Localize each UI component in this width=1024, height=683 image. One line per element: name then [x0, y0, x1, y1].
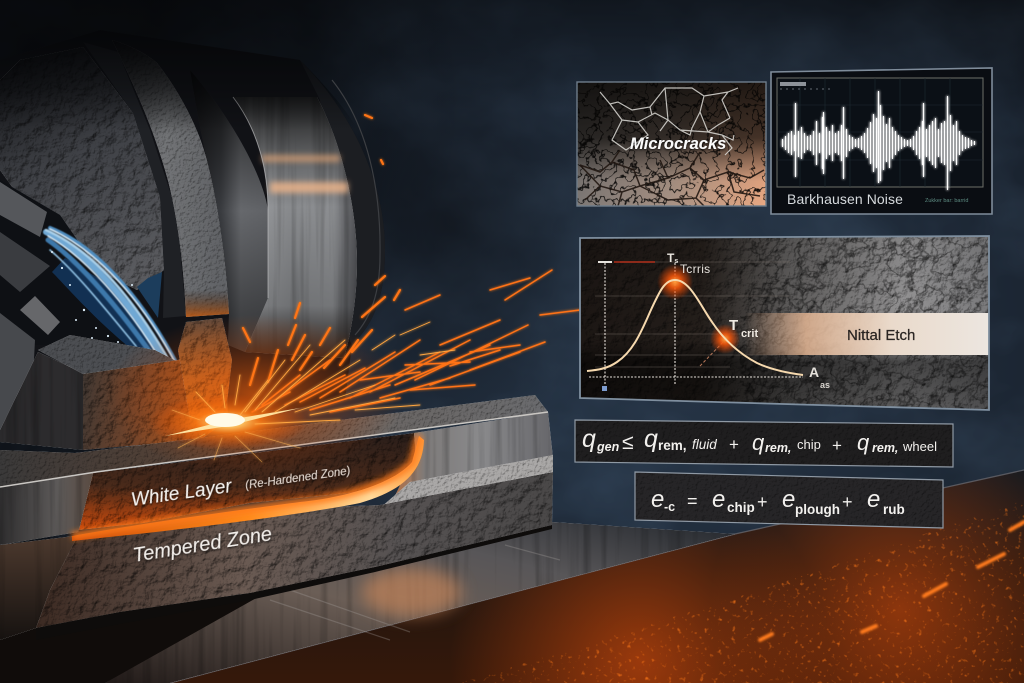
rough grinding face: [0, 47, 164, 290]
temperature curve: [587, 280, 803, 375]
equation text: rem,: [765, 441, 791, 455]
steel bed: [105, 522, 735, 683]
Barkhausen noise label: Barkhausen Noise: [787, 191, 903, 207]
equation text: q: [644, 425, 658, 453]
wheel top shadow: [0, 30, 358, 130]
equation text: rem,: [872, 441, 898, 455]
waveform core: [782, 140, 974, 146]
white layer label: (Re-Hardened Zone): [244, 465, 351, 492]
equation text: q: [582, 425, 596, 453]
equation text: +: [729, 435, 739, 454]
grinding wheel: [0, 30, 385, 420]
waveform: [782, 91, 974, 190]
microcracks label: Microcracks: [630, 135, 726, 153]
equation text: e: [651, 486, 664, 513]
As label: as: [820, 380, 830, 390]
lower dark crack cells: [580, 150, 764, 206]
block left face: [0, 352, 83, 450]
microcrack network: [600, 88, 738, 155]
nital etch band: [745, 313, 989, 355]
middle nozzle block: [0, 232, 50, 292]
chart axes: [589, 263, 803, 385]
hot seam: [72, 436, 424, 541]
lower left block: [0, 313, 35, 430]
equation text: fluid: [692, 437, 717, 452]
light band: [380, 455, 553, 508]
right steel face: [393, 412, 553, 500]
plot header chip: [780, 82, 806, 86]
equation text: rub: [883, 502, 905, 517]
equation text: [651, 486, 905, 517]
steel rim: [112, 40, 229, 317]
chart gridlines: [595, 262, 790, 367]
Ts label: s: [674, 258, 678, 265]
nozzle backing: [0, 180, 150, 345]
equation text: chip: [797, 437, 821, 452]
middle ring band: [190, 70, 268, 352]
rough lower zone: [36, 472, 553, 628]
panel: temperature curve and nital etch: [580, 236, 990, 411]
equation text: plough: [795, 502, 840, 517]
blue wedge: [137, 272, 162, 318]
grinding fire glow: [105, 315, 405, 475]
block front rough face: [83, 340, 228, 450]
equation: energy partition: [635, 472, 943, 528]
equation: heat balance: [575, 420, 953, 467]
equation text: q: [857, 430, 870, 455]
coolant nozzle assembly: [0, 180, 150, 430]
equation text: rem,: [658, 438, 687, 453]
equation text: =: [687, 491, 698, 511]
block top face: [38, 335, 178, 374]
outer wheel ring: [300, 60, 385, 345]
sparks: [172, 115, 580, 462]
dark base under slab: [0, 596, 260, 683]
axis origin marker: [602, 386, 607, 391]
equation text: +: [832, 436, 842, 455]
dark groove: [83, 42, 186, 318]
waveform plot frame: [777, 78, 983, 187]
lower left face: [0, 528, 150, 640]
equation text: gen: [596, 440, 620, 454]
Tcrit subscript label: crit: [741, 328, 758, 340]
steel cylinder: [233, 97, 357, 358]
white layer label: White Layer: [130, 476, 234, 511]
slab top surface: [0, 395, 548, 487]
white layer label: [130, 459, 352, 511]
equation text: e: [867, 486, 880, 513]
equation text: q: [752, 430, 765, 455]
equation text: wheel: [902, 439, 937, 454]
equation text: e: [712, 486, 725, 513]
panel: Barkhausen noise: [771, 68, 992, 214]
white layer dark crust: [79, 433, 416, 530]
wheel backing: [0, 30, 385, 420]
equation text: e: [782, 486, 795, 513]
panel: microcracks: [577, 82, 766, 206]
cylinder reflections: [262, 155, 348, 193]
coolant stream: [46, 228, 178, 366]
tempered zone label: Tempered Zone: [131, 523, 274, 567]
equation text: +: [842, 492, 853, 512]
orange debris: [178, 318, 232, 420]
workpiece block under wheel: [0, 318, 232, 450]
Ts label: T: [667, 251, 674, 265]
dark floor with embers: [170, 470, 1024, 683]
left steel face: [0, 472, 96, 545]
nozzle pin: [20, 296, 60, 335]
equation text: -c: [664, 500, 675, 514]
slab top edge highlight: [0, 412, 548, 487]
upper nozzle block: [0, 182, 47, 237]
curve hot spots: [657, 264, 740, 354]
equation text: +: [757, 492, 768, 512]
equation text: ≤: [622, 431, 634, 454]
equation text: chip: [727, 500, 755, 515]
workpiece slab: [0, 395, 553, 640]
Tcrris label: Tcrris: [680, 262, 710, 276]
small readout: Zukker bar: barrid: [925, 198, 968, 204]
A label: A: [809, 364, 819, 380]
equation text: [582, 425, 937, 455]
Tcrit T label: T: [729, 317, 738, 334]
nital etch label: Nittal Etch: [847, 327, 915, 344]
